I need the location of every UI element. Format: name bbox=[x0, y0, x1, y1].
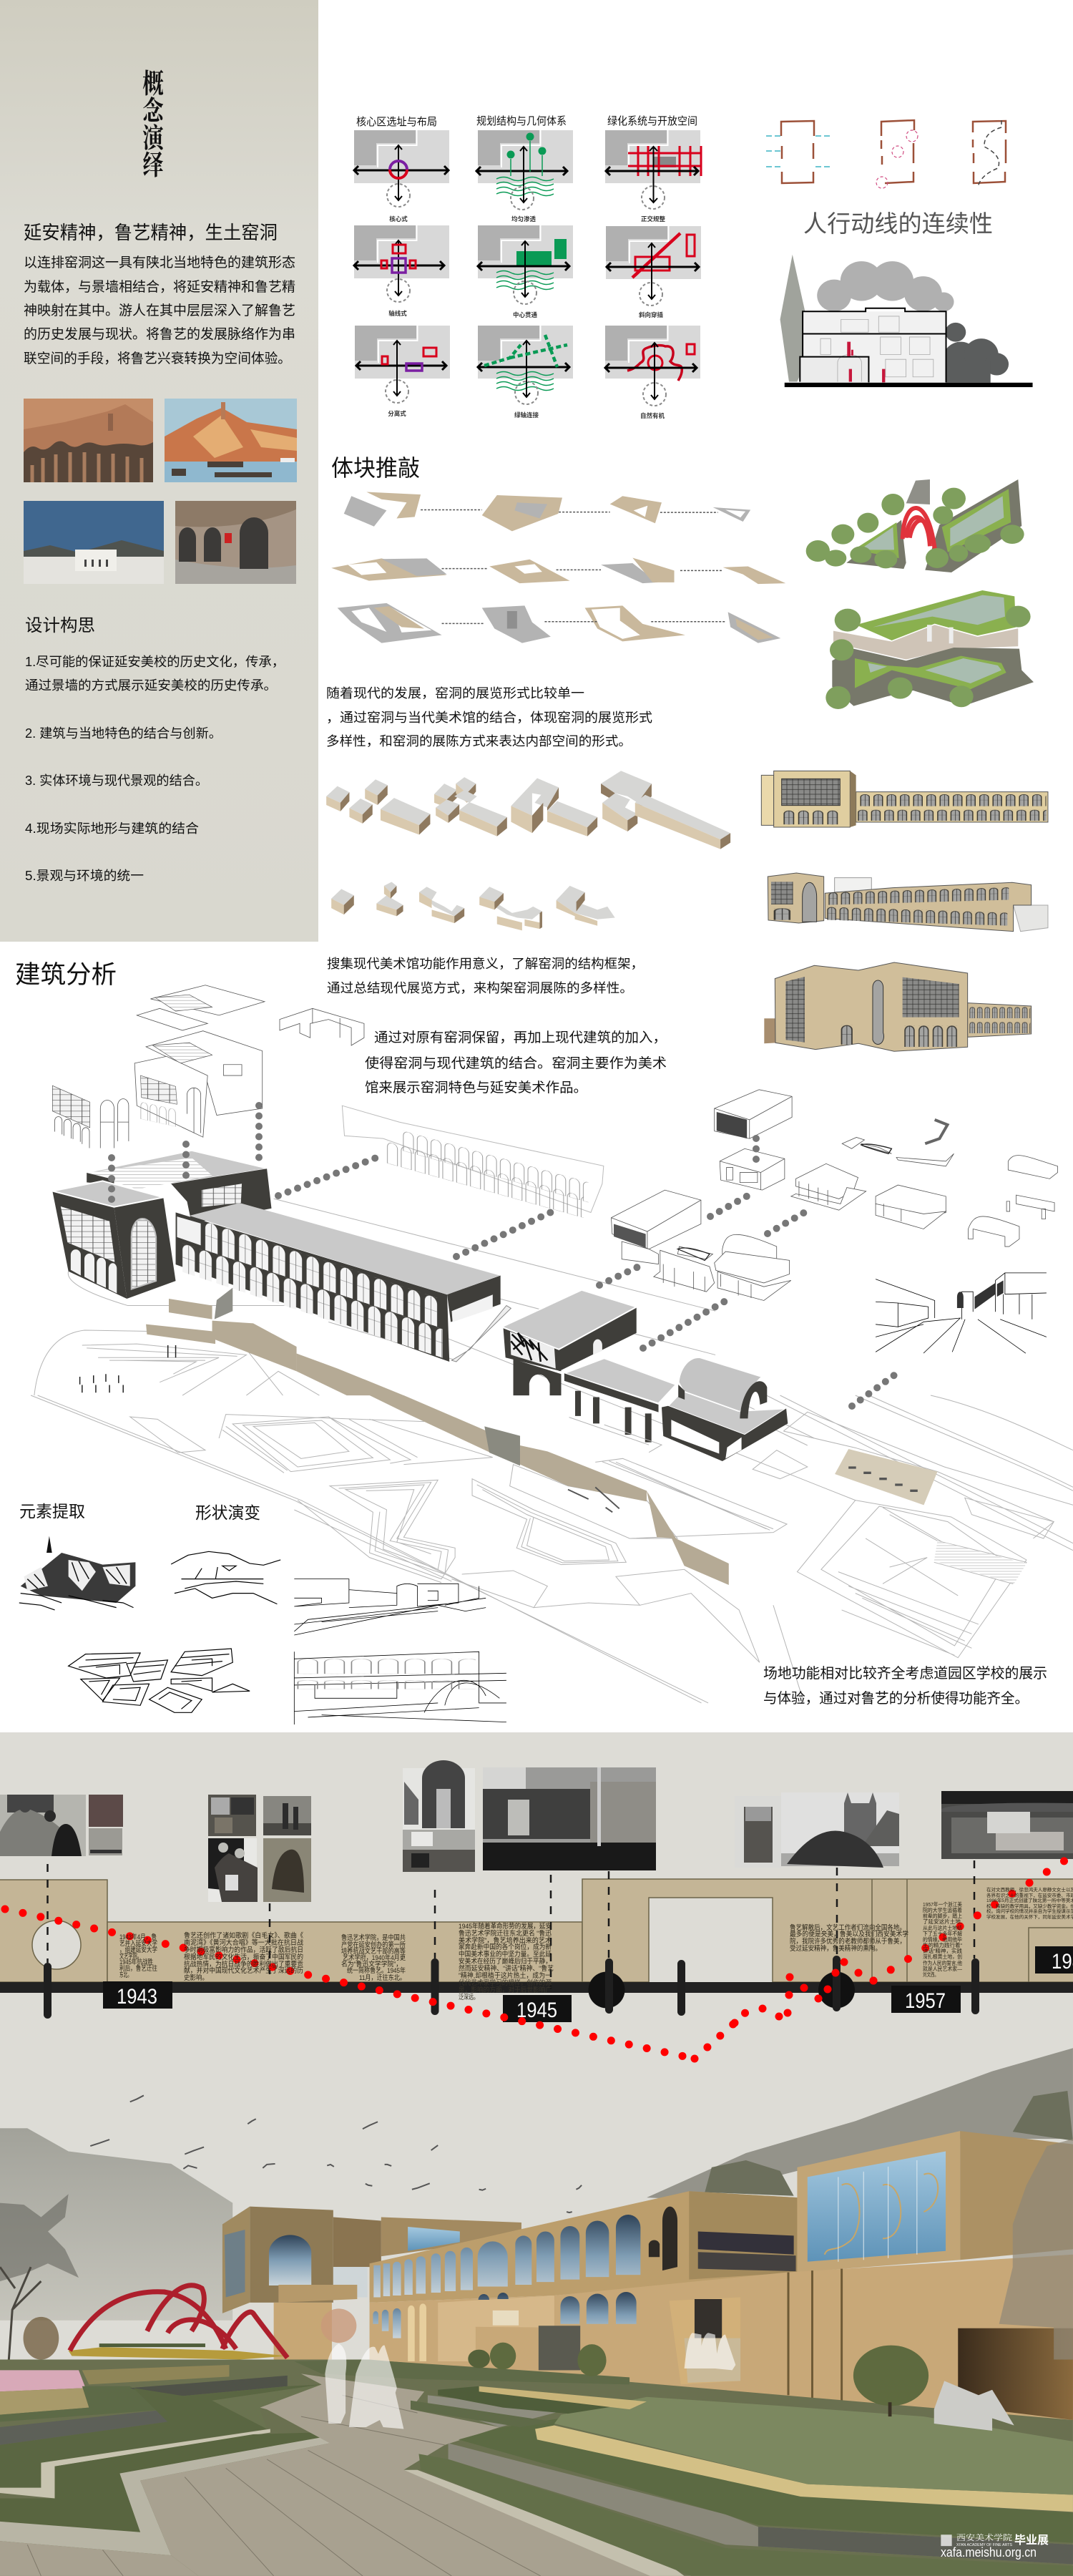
blocks group d bbox=[601, 771, 730, 849]
shrubs bbox=[24, 2308, 929, 2416]
massing blocks bbox=[326, 771, 730, 930]
landscape models bbox=[806, 479, 1034, 709]
photo: memorial building bbox=[24, 501, 164, 584]
text block: works: 争时期极富影响力的作品，活跃了敌后抗日 bbox=[184, 1946, 303, 1954]
text block: research: 搜集现代美术馆功能作用意义，了解窑洞的结构框架， bbox=[327, 957, 644, 971]
heading: element extraction: 元素提取 bbox=[19, 1502, 85, 1521]
red sculpture bbox=[69, 2285, 288, 2360]
text block: 1986 bbox=[986, 1886, 1073, 1920]
year: 1943 bbox=[103, 1981, 172, 2009]
icon: nodes bbox=[876, 120, 918, 188]
heading: green: 绿化系统与开放空间 bbox=[607, 115, 697, 127]
text block: research: 通过总结现代展览方式，来构架窑洞展陈的多样性。 bbox=[327, 981, 633, 995]
panel: final rendering bbox=[0, 2048, 1073, 2576]
text block: 1945 move bbox=[459, 1922, 554, 2001]
text block: 1986: 校。稀缺的教学用具，又缺少教学资金。他 bbox=[986, 1903, 1073, 1909]
exploded model: main building bbox=[34, 985, 715, 1395]
text block: works: 鲁艺还创作了诸如歌剧《白毛女》、歌曲《 bbox=[184, 1931, 303, 1940]
text block: 1957: 院的大学生追循着 bbox=[923, 1906, 962, 1913]
diagram: separate type bbox=[355, 326, 450, 417]
text block: development: ，通过窑洞与当代美术馆的结合，体现窑洞的展览形式 bbox=[326, 711, 652, 725]
panel: timeline bbox=[0, 1760, 1073, 2059]
text block: 1957: 从此与这片土地结 bbox=[923, 1924, 962, 1931]
text block: 1943: 艺并入延安大学 bbox=[119, 1939, 157, 1948]
text block: 1943: 文艺学院。 bbox=[119, 1952, 142, 1961]
building: wing bbox=[370, 2191, 797, 2303]
text block: after dissolution: 最多的便是央美，鲁美以及我们西安美术学 bbox=[790, 1930, 908, 1938]
timeline main bar bbox=[0, 1982, 1073, 1993]
exploded upper box bbox=[134, 1031, 263, 1137]
tan building models bbox=[761, 771, 1048, 1051]
diagram: axis type bbox=[354, 225, 449, 317]
text block: 1945 move: 家奔赴新中国的各个岗位，成为新 bbox=[459, 1943, 552, 1951]
exhibition squares bbox=[848, 1466, 918, 1492]
year: 1957: 1957 bbox=[905, 1989, 946, 2013]
text block: concept description: 的历史发展与现状。将鲁艺的发展脉络作为串 bbox=[24, 326, 295, 342]
text block: 1945 move: 代代艺术家学习的榜样，创作的源 bbox=[459, 1979, 552, 1987]
text block: 1943: 东北。 bbox=[119, 1971, 132, 1979]
heading: shape evolution: 形状演变 bbox=[195, 1503, 260, 1522]
building: upper right block bbox=[797, 2131, 1073, 2273]
mountains bbox=[0, 2048, 1073, 2321]
photo group: umbrellas bbox=[941, 1791, 1073, 1859]
text block: after dissolution bbox=[790, 1923, 908, 1953]
heading: spirit: 延安精神，鲁艺精神，生土窑洞 bbox=[24, 222, 278, 243]
diagram: central run bbox=[478, 225, 573, 318]
right translucent tree bbox=[999, 2139, 1073, 2360]
text block: concept description: 联空间的手段，将鲁艺兴衰转换为空间体验。 bbox=[24, 351, 291, 366]
text block: 1945 move: 泛深远。 bbox=[459, 1994, 479, 2001]
model: wall with arches bbox=[806, 479, 1024, 572]
building: tower bbox=[222, 2207, 521, 2360]
diagram: even infiltration: 均匀渗透 bbox=[511, 215, 536, 223]
diagram: diagonal: 斜向穿插 bbox=[639, 311, 663, 318]
site plan linework bbox=[31, 1324, 1073, 1703]
heading: circulation: 人行动线的连续性 bbox=[803, 210, 993, 237]
text block: works: 史影响。 bbox=[184, 1974, 208, 1982]
text block: concept description: 以连排窑洞这一具有陕北当地特色的建筑形态 bbox=[24, 255, 295, 270]
text block: academy: 艺术学府，1940年4月更 bbox=[343, 1953, 406, 1962]
heading: design idea: 设计构思 bbox=[25, 616, 95, 635]
blocks group b bbox=[434, 777, 507, 836]
text block: 1943: 利后，鲁艺迁往 bbox=[119, 1964, 157, 1973]
text block: 1957: 刘文西。 bbox=[923, 1971, 939, 1978]
text block: 1957: 的情缘。他用他毕 bbox=[923, 1936, 962, 1943]
year: 198x bbox=[1035, 1946, 1073, 1974]
text block: 1957: 作为人民的誓言,他 bbox=[923, 1959, 962, 1966]
text block: works: 献，并对中国现代文化艺术产生了深远的历 bbox=[184, 1966, 303, 1975]
panel: circulation continuity bbox=[766, 120, 1033, 387]
text block: works bbox=[184, 1931, 303, 1982]
text block: site function bbox=[763, 1665, 1047, 1707]
diagram: diagonal bbox=[606, 226, 701, 318]
title: concept evolution: 概 bbox=[142, 69, 164, 99]
title: concept evolution bbox=[142, 69, 167, 181]
tan wall sections bbox=[370, 1395, 729, 1585]
text block: academy: 11月，迁往东北。 bbox=[359, 1974, 406, 1982]
diagram: orthogonal bbox=[605, 130, 702, 223]
text block: 1957: 讲话”精神，实践 bbox=[923, 1947, 962, 1954]
text block: 1945 move: 泉，影响的方面，对于后世影响广 bbox=[459, 1986, 552, 1994]
exploded model: pavilion bbox=[564, 1090, 1058, 1461]
text block: academy: 产党在延安创办的第一所 bbox=[341, 1941, 406, 1949]
exploded cave plan bbox=[280, 1008, 364, 1045]
text block: development: 随着现代的发展，窑洞的展览形式比较单一 bbox=[326, 686, 584, 701]
front tower bbox=[52, 1181, 176, 1299]
pavilion exploded parts bbox=[715, 1090, 1058, 1246]
text block: 1957: 前辈的脚步，踏上 bbox=[923, 1912, 962, 1919]
birds bbox=[90, 2095, 582, 2212]
text block: works: 根据地军民的文化生活，振奋了中国军民的 bbox=[184, 1953, 303, 1961]
text block: 1945 move: 中国美术事业的中坚力量。至此延 bbox=[459, 1950, 552, 1958]
text block: 1945 move: 美术学院”，鲁艺培养出来的艺术 bbox=[459, 1936, 552, 1945]
timeline pegs bbox=[44, 1956, 979, 2019]
text block: design points: 4.现场实际地形与建筑的结合 bbox=[25, 821, 199, 836]
gray walls bbox=[146, 1288, 403, 1395]
dotted connector lines bbox=[112, 1106, 897, 1406]
linework around main building bbox=[34, 1199, 715, 1395]
text block: 1943: ，组建延安大学 bbox=[119, 1946, 157, 1954]
text block: academy: 培养抗战文艺干部的高等 bbox=[341, 1947, 406, 1956]
diagram: central run: 中心贯通 bbox=[513, 311, 537, 318]
watermark text: 毕业展 bbox=[1014, 2534, 1049, 2547]
rear block bbox=[87, 1151, 271, 1224]
watermark text: XI'AN ACADEMY OF FINE ARTS bbox=[956, 2543, 1013, 2547]
diagram: green axis: 绿轴连接 bbox=[514, 411, 539, 419]
year: 1945: 1945 bbox=[516, 1999, 557, 2022]
diagram: organic bbox=[605, 326, 700, 419]
sketch: pagoda on hill bbox=[19, 1536, 135, 1610]
heading: geometry: 规划结构与几何体系 bbox=[476, 115, 567, 127]
street perspective sketch bbox=[876, 1273, 1047, 1353]
text block: design points bbox=[25, 655, 285, 883]
text block: 1986: 学校发展，在他的关怀下，同年延安美术学 bbox=[986, 1913, 1073, 1920]
text block: academy: 名为“鲁迅文学学院”， bbox=[341, 1960, 402, 1968]
text block: design points: 5.景观与环境的统一 bbox=[25, 869, 144, 883]
title: concept evolution: 绎 bbox=[142, 151, 164, 181]
text block: after dissolution: 院，我院许多优秀的老教师都师从于鲁美， bbox=[790, 1937, 906, 1946]
text block: design points: 1.尽可能的保证延安美校的历史文化，传承， bbox=[25, 655, 285, 669]
timeline section background bbox=[0, 1732, 1073, 2576]
year: 1945 bbox=[503, 1995, 572, 2022]
text block: 1957: 生的精力践行着“ bbox=[923, 1941, 962, 1948]
model: perspective left bbox=[768, 873, 1048, 932]
diagram: organic: 自然有机 bbox=[640, 412, 665, 419]
text block: 1957: 就是人民艺术家— bbox=[923, 1965, 962, 1972]
text block: site function: 场地功能相对比较齐全考虑道园区学校的展示 bbox=[763, 1665, 1047, 1682]
building: lower wall bbox=[370, 2255, 1073, 2422]
text block: 1957: 下了五十多年不解 bbox=[923, 1930, 962, 1937]
photo group: performance bbox=[403, 1760, 656, 1872]
text block: 1957: 深扎根黄土地，创 bbox=[923, 1953, 962, 1960]
diagram: separate type: 分离式 bbox=[388, 410, 406, 417]
text block: 1945 move: 1945年随着革命形势的发展，延安 bbox=[459, 1922, 552, 1931]
diagram: core type bbox=[354, 130, 449, 223]
watermark text: xafa.meishu.org.cn bbox=[941, 2545, 1037, 2560]
sketch: form evolution plans bbox=[69, 1649, 250, 1712]
row 3 plans bbox=[338, 603, 780, 643]
diagram: green axis bbox=[478, 326, 573, 419]
text block: 1986: 1986年5月正式创建了陕北第一所中等美术 bbox=[986, 1897, 1073, 1903]
sketch: perspective one bbox=[294, 1579, 486, 1635]
blocks group a bbox=[326, 779, 430, 834]
text block: academy: 统一简称鲁艺。1945年 bbox=[347, 1966, 406, 1975]
section drawing bbox=[780, 255, 1033, 387]
third dark block bbox=[502, 1290, 637, 1395]
text block: after dissolution: 受过延安精神，鲁美精神的熏陶。 bbox=[790, 1944, 881, 1953]
text block: 1943 bbox=[119, 1933, 157, 1979]
icon: entrances bbox=[766, 121, 830, 183]
text block: development: 多样性，和窑洞的展陈方式来表达内部空间的形式。 bbox=[326, 734, 632, 748]
diagram: axis type: 轴线式 bbox=[388, 310, 407, 317]
timeline tan bands bbox=[0, 1879, 1073, 1982]
pavilion assembled drawing bbox=[611, 1190, 791, 1300]
ghost cave wing bbox=[342, 1106, 604, 1218]
text block: preservation bbox=[365, 1030, 667, 1096]
heading: core site: 核心区选址与布局 bbox=[356, 116, 437, 128]
text block: 1986: 校。询问学校的情况并亲自为学生授课示范 bbox=[986, 1908, 1073, 1914]
sketch: abstract mountain bbox=[171, 1551, 280, 1604]
text block: 1945 move: 然而延安精神、“讲话”精神、“鲁艺 bbox=[459, 1964, 554, 1973]
title: concept evolution: 演 bbox=[142, 124, 167, 154]
diagram: core type: 核心式 bbox=[389, 215, 408, 223]
model: terraced plaza bbox=[825, 590, 1034, 709]
text block: design points: 3. 实体环境与现代景观的结合。 bbox=[25, 774, 208, 788]
model: elevation bbox=[761, 771, 1048, 827]
text block: after dissolution: 鲁艺解散后，文艺工作者们流向全国各地。 bbox=[790, 1923, 906, 1932]
photo group: Lu Xun Academy bbox=[208, 1795, 311, 1902]
photo: relief sculpture bbox=[24, 399, 153, 482]
year: 1957 bbox=[891, 1986, 961, 2013]
text block: preservation: 使得窑洞与现代建筑的结合。窑洞主要作为美术 bbox=[365, 1055, 667, 1071]
pavilion dark building bbox=[564, 1358, 788, 1461]
text block: concept description bbox=[24, 255, 295, 366]
row 1 plans bbox=[344, 492, 750, 531]
diagram: orthogonal: 正交规整 bbox=[641, 215, 665, 223]
blocks group c bbox=[511, 778, 597, 836]
model: perspective right bbox=[764, 962, 1032, 1051]
photo group: 1943 bbox=[0, 1795, 123, 1856]
photo: painted landscape bbox=[165, 399, 297, 482]
exploded facade windows bbox=[52, 1085, 129, 1148]
text block: concept description: 神映射在其中。游人在其中层层深入了解鲁艺 bbox=[24, 303, 295, 318]
text block: academy bbox=[341, 1933, 406, 1982]
massing site diagrams bbox=[331, 492, 785, 643]
text block: 1945 move: 安美术在经历了巅峰后归于平静， bbox=[459, 1957, 552, 1966]
tree left bbox=[0, 2194, 79, 2388]
animal sculpture bbox=[934, 2381, 1014, 2431]
text block: works: 抗战热情，为抗日战争的胜利做出了重要贡 bbox=[184, 1960, 303, 1968]
title: concept evolution: 念 bbox=[142, 97, 165, 127]
timeline black nodes bbox=[588, 1972, 855, 2008]
text block: works: 南泥湾》《黄河大合唱》等一大批在抗日战 bbox=[184, 1938, 303, 1947]
text block: academy: 鲁迅艺术学院，是中国共 bbox=[341, 1933, 406, 1942]
photo: cave dwelling bbox=[175, 501, 296, 584]
photo group: group at church bbox=[735, 1792, 899, 1868]
text block: preservation: 通过对原有窑洞保留，再加上现代建筑的加入， bbox=[374, 1030, 667, 1045]
small blocks row bbox=[331, 882, 615, 930]
text block: 1986: 各界有识之士的重视下，在延安市委、市政 bbox=[986, 1892, 1073, 1898]
plaza ground bbox=[0, 2360, 1073, 2576]
text block: site function: 与体验，通过对鲁艺的分析使得功能齐全。 bbox=[763, 1690, 1029, 1707]
text on wall bbox=[568, 1487, 619, 1512]
year: 1943: 1943 bbox=[117, 1985, 157, 2009]
icon: route bbox=[973, 120, 1006, 187]
text block: preservation: 馆来展示窑洞特色与延安美术作品。 bbox=[365, 1080, 587, 1096]
dark lower pavilion site bbox=[370, 1395, 918, 1585]
watermark logo bbox=[941, 2534, 952, 2546]
row 2 plans bbox=[331, 557, 785, 584]
long cave wing bbox=[176, 1203, 511, 1362]
text block: 1957: 了延安这片土地, bbox=[923, 1918, 962, 1925]
sunken plaza sketch bbox=[80, 1344, 319, 1395]
panel: concept bbox=[0, 0, 318, 942]
heading: massing: 体块推敲 bbox=[331, 455, 420, 481]
watermark text: 西安美术学院 bbox=[956, 2532, 1012, 2542]
text block: 1943: 1943年4月，鲁 bbox=[119, 1933, 157, 1941]
text block: 1957 bbox=[923, 1901, 962, 1978]
timeline dashed stems bbox=[47, 1860, 974, 1989]
heading: architecture analysis: 建筑分析 bbox=[15, 961, 117, 989]
red dotted route bbox=[5, 1855, 1073, 2059]
text block: 1945 move: 鲁迅艺术学院迁往东北更名 “鲁迅 bbox=[459, 1929, 552, 1938]
exploded roof plates bbox=[137, 985, 265, 1030]
watermark text bbox=[941, 2532, 1049, 2560]
people silhouettes bbox=[325, 2333, 735, 2429]
sketch: perspective two bbox=[294, 1652, 506, 1724]
text block: 1986: 在对文西教师，徐悲鸿夫人廖静文女士以及 bbox=[986, 1886, 1073, 1893]
text block: research bbox=[327, 957, 644, 995]
text block: 1957: 1957年一个浙江美 bbox=[923, 1901, 962, 1908]
text block: design points: 2. 建筑与当地特色的结合与创新。 bbox=[25, 726, 222, 741]
text block: concept description: 为载体，与景墙相结合，将延安精神和鲁艺精 bbox=[24, 279, 295, 295]
text block: 1943: 1945年抗战胜 bbox=[119, 1958, 153, 1966]
timeline circle bbox=[32, 1921, 81, 1969]
sketches bbox=[19, 1536, 506, 1724]
text block: design points: 通过景墙的方式展示延安美校的历史传承。 bbox=[25, 678, 277, 693]
text block: 1945 move: ”精神,却根植于这片热土，成为一 bbox=[459, 1971, 552, 1980]
text block: development bbox=[326, 686, 652, 748]
panel: planning diagrams bbox=[354, 115, 702, 419]
diagram: even infiltration bbox=[476, 130, 573, 223]
